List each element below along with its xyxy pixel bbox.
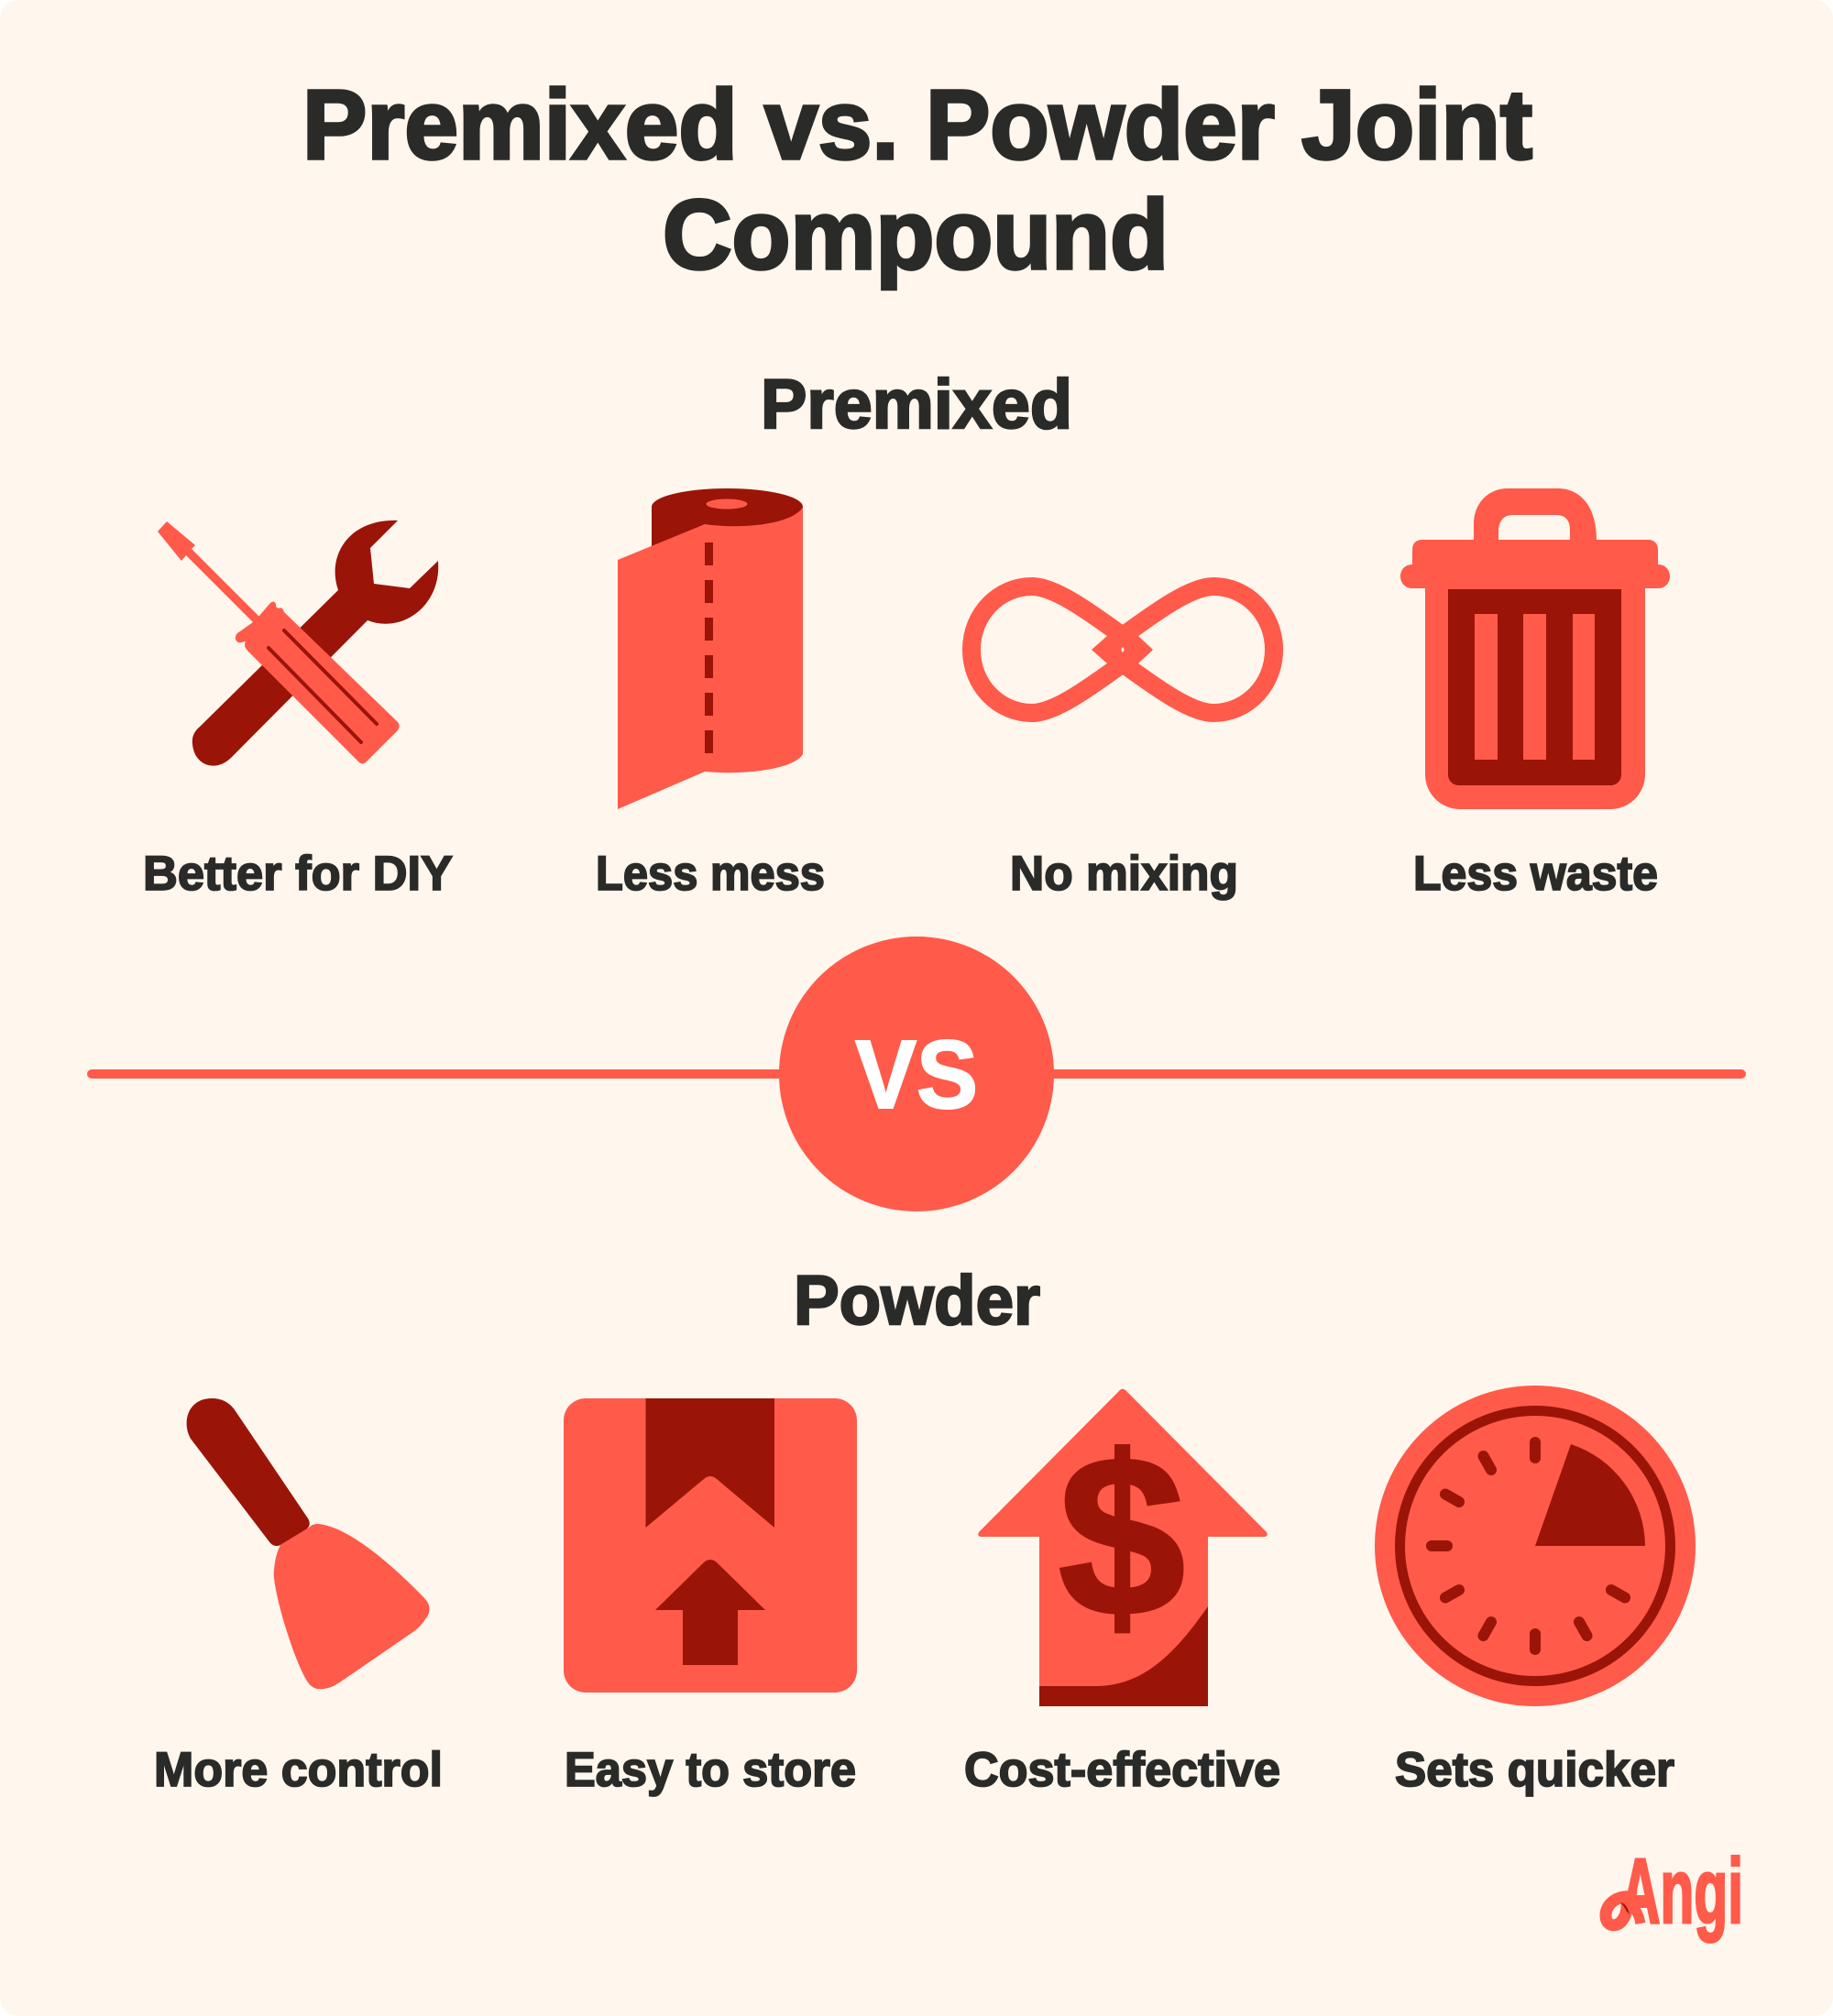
title [302,69,1532,290]
label: more control: More control [154,1743,443,1797]
title: Premixed vs. Powder Joint [302,69,1532,180]
icon: paper towel roll [618,488,803,809]
heading: premixed: Premixed [761,366,1072,444]
icon: cost arrow with dollar [978,1389,1268,1706]
icon: infinity [971,586,1274,713]
divider with VS badge [92,937,1741,1211]
panel: premixed [143,366,1670,901]
label: sets quicker: Sets quicker [1395,1743,1674,1797]
label: better for DIY: Better for DIY [143,847,453,901]
heading: powder: Powder [794,1262,1040,1340]
icon: putty knife [187,1398,429,1689]
panel: powder [154,1262,1696,1797]
label: easy to store: Easy to store [565,1743,856,1797]
logo: Angi: Angi [1620,1840,1743,1943]
icon: trash can [1400,488,1670,809]
label: cost-effective: Cost-effective [964,1743,1280,1797]
icon: storage box [564,1398,857,1693]
icon: timer clock [1375,1386,1696,1706]
title: Compound [663,179,1169,290]
icon: wrench and screwdriver [158,520,438,766]
label: less waste: Less waste [1413,847,1658,901]
divider with VS badge: VS [855,1021,978,1129]
logo: Angi [1606,1840,1743,1943]
label: less mess: Less mess [596,847,825,901]
label: no mixing: No mixing [1010,847,1238,901]
icon: cost arrow with dollar: $ [1059,1408,1185,1663]
